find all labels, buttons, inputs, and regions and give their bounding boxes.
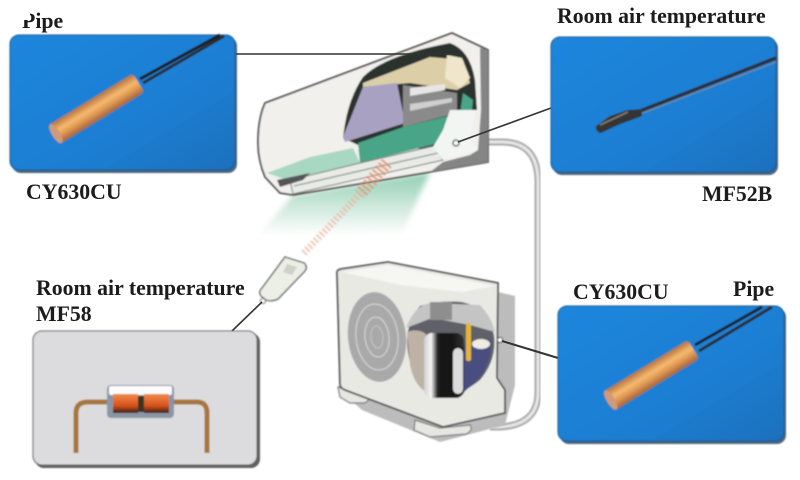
- sensor wire: [140, 35, 220, 79]
- resistor leads: [76, 402, 207, 453]
- outdoor unit top: [342, 265, 494, 292]
- indoor unit rear cap: [430, 48, 488, 172]
- heading: Room air temperature top right: Room air temperature: [557, 4, 766, 28]
- heading: Pipe top left: Pipe: [22, 9, 63, 33]
- infrared signal: [303, 163, 387, 254]
- outdoor cutaway: [407, 302, 494, 398]
- indoor coil tan: [363, 57, 470, 90]
- remote control: [260, 257, 306, 304]
- glass thermistor body: [107, 385, 174, 418]
- indoor unit body: [258, 33, 488, 195]
- model label: CY630CU bottom right: CY630CU: [573, 280, 669, 304]
- panel: pipe sensor top left: [10, 35, 237, 173]
- copper sensor probe: [602, 340, 699, 412]
- sensor wire: [695, 307, 762, 345]
- indoor unit louvers: [290, 146, 443, 194]
- indoor light green panel: [267, 148, 360, 180]
- heading: Room air temperature MF58: [36, 276, 245, 326]
- indoor unit cutaway: [343, 43, 477, 150]
- outdoor unit: [337, 262, 515, 442]
- heading: Room air temperature MF58: MF58: [36, 302, 92, 326]
- outdoor unit body: [337, 262, 505, 427]
- outdoor blue interior: [464, 340, 491, 392]
- leader lines: [232, 54, 558, 358]
- outdoor white valve: [472, 339, 490, 349]
- thin sensor wire: [640, 58, 776, 111]
- indoor unit green interior: [358, 93, 473, 163]
- panel: room air sensor bottom left: [33, 331, 260, 468]
- outdoor compressor: [424, 333, 464, 398]
- heading: Pipe bottom right: Pipe: [733, 277, 774, 301]
- model label: CY630CU top left: CY630CU: [26, 180, 122, 204]
- panel: pipe sensor bottom right: [558, 306, 786, 444]
- outdoor fan grille: [343, 289, 411, 385]
- sensor dot indoor: [453, 140, 459, 146]
- sensor dot outdoor: [497, 337, 503, 343]
- indoor end cap: [433, 110, 478, 160]
- outdoor yellow tube: [466, 323, 471, 361]
- heading: Room air temperature MF58: Room air temperature: [36, 276, 245, 300]
- indoor unit filter block: [343, 83, 405, 142]
- copper sensor probe: [47, 73, 144, 145]
- refrigerant pipe between units: [488, 142, 538, 427]
- indoor unit: [258, 33, 488, 195]
- cold airflow beam: [258, 172, 430, 236]
- bead sensor tip: [596, 109, 642, 133]
- outdoor unit shadow: [345, 292, 515, 442]
- panel: room air sensor top right: [551, 37, 778, 175]
- model label: MF52B: MF52B: [702, 182, 772, 206]
- outdoor unit feet: [338, 387, 368, 403]
